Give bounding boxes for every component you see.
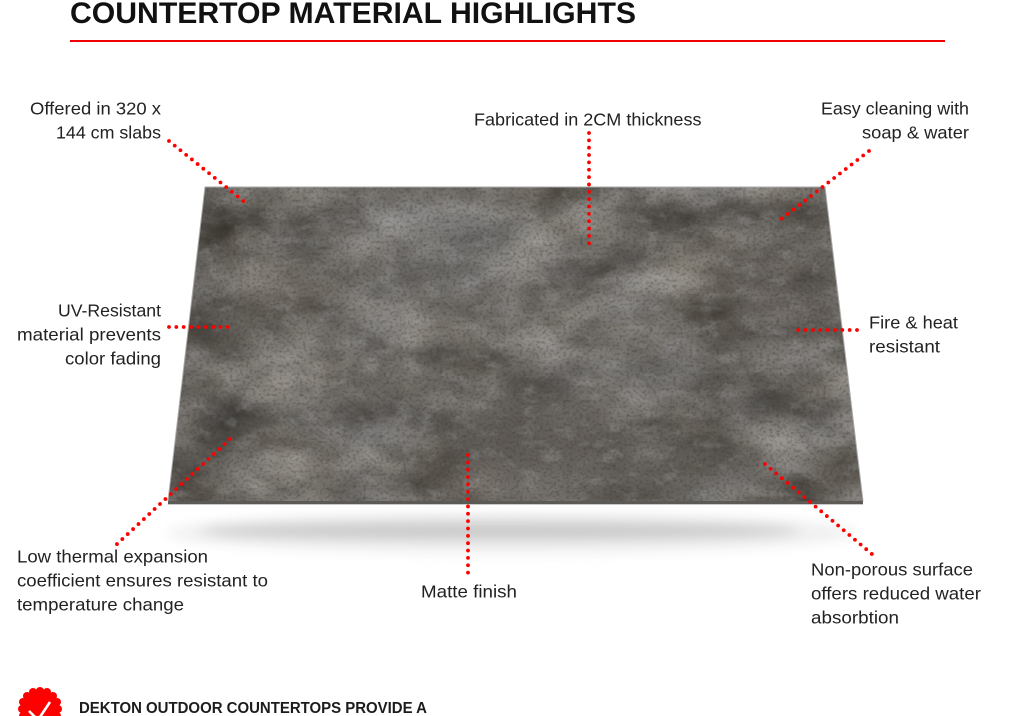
callout: slab size: Offered in 320 x [30, 99, 161, 119]
callout: non-porous: Non-porous surface [811, 560, 973, 580]
callout: easy cleaning: Easy cleaning with [821, 99, 969, 119]
callout: fire and heat: resistant [869, 337, 940, 357]
callout: fire and heat [798, 313, 958, 357]
slab front edge [168, 501, 863, 504]
callout: UV resistant: UV-Resistant [58, 301, 161, 321]
floor shadow under slab [167, 512, 857, 554]
callout: non-porous [765, 464, 981, 628]
callout: thickness: Fabricated in 2CM thickness [474, 110, 702, 130]
countertop slab [160, 180, 870, 510]
callout: thermal expansion: coefficient ensures resistant to [17, 571, 268, 591]
callout: UV resistant [17, 301, 228, 369]
callout: matte finish: Matte finish [421, 582, 517, 602]
callout: UV resistant: material prevents [17, 325, 161, 345]
callout: fire and heat: Fire & heat [869, 313, 958, 333]
callout: easy cleaning: soap & water [862, 123, 969, 143]
callout: non-porous: offers reduced water [811, 584, 981, 604]
icon: red badge with check mark [18, 687, 62, 716]
slab bevel highlights [168, 187, 863, 501]
callout: thermal expansion [17, 439, 268, 615]
callout: thermal expansion: temperature change [17, 595, 184, 615]
callout: non-porous: absorbtion [811, 608, 899, 628]
callout: slab size [30, 99, 244, 202]
callout: thermal expansion: Low thermal expansion [17, 547, 208, 567]
callout: UV resistant: color fading [65, 349, 161, 369]
callout: slab size: 144 cm slabs [56, 123, 161, 143]
title underline [70, 40, 945, 42]
callout: easy cleaning [780, 99, 969, 220]
